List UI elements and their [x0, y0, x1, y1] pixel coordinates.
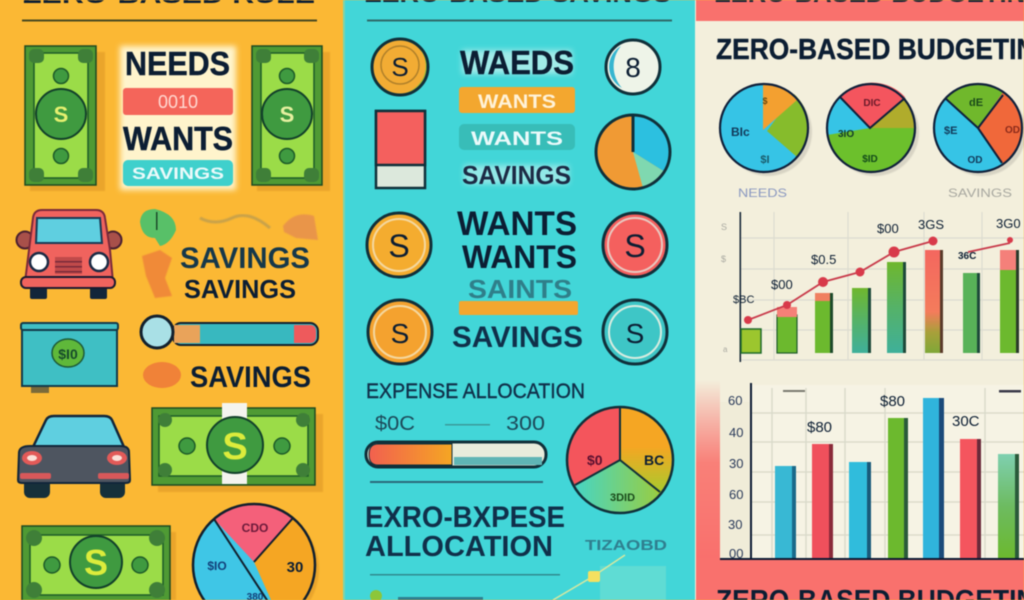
progress bar: expense allocation — [366, 413, 546, 483]
heading: expense allocation: EXPENSE ALLOCATION — [366, 380, 585, 403]
pie chart: second budget pie: 3IO — [838, 129, 854, 140]
icon: orange coin row three — [368, 300, 432, 364]
icon: orange coin row two — [367, 213, 431, 277]
text block: center labels top: WAEDS — [460, 44, 574, 81]
icon: dark car rear — [18, 416, 130, 498]
chart: column bar chart: 60 — [728, 393, 742, 408]
legend: needs label: NEEDS — [738, 186, 787, 200]
heading: exro-bxpese allocation: EXRO-BXPESE — [365, 501, 565, 534]
text block: center labels top: WANTS — [478, 92, 556, 113]
icon: vertical banknote left — [25, 46, 105, 191]
icon: savings doodle and repeated labels: SAVINGS — [180, 242, 310, 275]
text block: needs and wants labels: 0010 — [158, 92, 198, 112]
pie chart: third budget pie: OD — [968, 155, 982, 166]
icon: red car front — [16, 210, 122, 299]
icon: progress thermometer bar — [141, 316, 318, 348]
pie chart: first budget pie — [720, 84, 812, 176]
pie chart: third budget pie — [934, 84, 1024, 176]
pie chart: third budget pie: OD — [1005, 125, 1020, 136]
pie chart: first budget pie: BIc — [731, 125, 750, 139]
icon: bottom banknote: S — [84, 542, 108, 583]
icon: teal cash box — [21, 323, 118, 393]
icon: vertical banknote left: S — [54, 102, 68, 127]
icon: savings doodle and repeated labels: SAVINGS — [184, 274, 296, 304]
icon: gold coin — [372, 39, 428, 95]
chart: column bar chart: 30C — [952, 413, 980, 430]
pie chart: third budget pie: dE — [969, 97, 983, 109]
heading: exro-bxpese allocation — [365, 501, 565, 563]
chart: bar and line chart: $00 — [877, 221, 899, 236]
pie chart: left panel — [193, 504, 319, 600]
icon: horizontal banknote with strap — [152, 403, 323, 492]
pie chart: first budget pie: $ — [762, 96, 768, 106]
text block: center labels bottom: WANTS — [462, 239, 577, 275]
icon: white and teal coin — [606, 40, 660, 94]
progress bar: expense allocation: $0C — [375, 413, 415, 435]
text block: needs and wants labels: NEEDS — [125, 45, 230, 82]
panel divider strip — [343, 0, 345, 600]
icon: orange coin row three: S — [391, 318, 409, 349]
icon: teal coin row three — [603, 300, 667, 364]
text block: center labels bottom — [452, 205, 583, 354]
chart: bar and line chart: $00 — [771, 277, 793, 292]
chart: bar and line chart: 3G0 — [996, 216, 1021, 231]
pie chart: expense allocation — [567, 407, 673, 513]
pie chart: expense allocation: BC — [644, 452, 664, 468]
pie chart: left panel: 30 — [287, 559, 303, 576]
icon: bottom banknote — [22, 526, 176, 600]
icon: horizontal banknote with strap: S — [222, 426, 248, 468]
chart: bar and line chart: $0.5 — [811, 252, 836, 267]
progress bar: expense allocation: 300 — [506, 413, 545, 435]
chart: bar and line chart: 36C — [958, 251, 976, 262]
icon: white and teal coin: 8 — [625, 52, 641, 83]
icon: vertical banknote right: S — [280, 102, 294, 127]
chart: column bar chart: 30 — [728, 517, 742, 532]
chart: bar and line chart: a — [723, 345, 728, 354]
heading: exro-bxpese allocation: ALLOCATION — [365, 531, 553, 563]
pie chart: expense allocation: 3DID — [610, 492, 635, 504]
panel: zero-based savings — [344, 0, 695, 600]
icon: orange coin row two: S — [388, 228, 410, 264]
text block: center labels bottom: SAINTS — [468, 274, 572, 304]
text block: needs and wants labels: WANTS — [123, 120, 233, 157]
pie chart: left panel: CDO — [242, 521, 268, 535]
panel: zero-based budgeting — [695, 0, 1024, 600]
legend: savings label: SAVINGS — [948, 186, 1012, 200]
chart: column bar chart: 40 — [729, 425, 743, 440]
text block: needs and wants labels — [120, 45, 236, 190]
chart: bar and line chart: $ — [721, 254, 726, 264]
icon: gold coin: S — [391, 52, 409, 82]
pie chart: first budget pie: $I — [760, 154, 770, 166]
pie chart: third budget pie: $E — [944, 125, 957, 137]
chart: column bar chart: $80 — [880, 393, 905, 410]
icon: teal coin row three: S — [626, 318, 644, 349]
chart: bar and line chart: S — [721, 222, 727, 232]
pie chart: second budget pie — [827, 83, 919, 176]
icon: red coin row two — [603, 213, 667, 277]
chart: column bar chart: 00 — [729, 546, 743, 561]
icon: vertical banknote right — [252, 46, 330, 191]
text block: center labels bottom: SAVINGS — [452, 321, 583, 354]
text block: center labels top — [459, 44, 575, 190]
chart: bar and line chart: $BC — [733, 294, 754, 306]
panel: zero-based rule — [0, 0, 344, 600]
icon: savings doodle and repeated labels — [140, 209, 318, 304]
pie chart: second budget pie: $ID — [862, 154, 878, 165]
chart: bar and line chart: 3GS — [918, 217, 944, 232]
icon: teal cash box: $I0 — [58, 346, 78, 362]
chart: column bar chart — [720, 383, 1024, 561]
chart: column bar chart: 60 — [729, 487, 743, 502]
text block: savings with orange badge: SAVINGS — [190, 361, 311, 394]
text block: center labels bottom: WANTS — [457, 205, 577, 243]
chart: bar and line chart — [721, 212, 1024, 362]
chart: column bar chart: 30 — [729, 456, 743, 471]
text block: needs and wants labels: SAVINGS — [132, 164, 224, 183]
small line chart with label: TIZAOBD — [585, 537, 667, 554]
pie chart: left panel: $IO — [207, 559, 227, 573]
pie chart: top right of middle panel — [596, 115, 671, 189]
pie chart: second budget pie: DIC — [863, 98, 881, 109]
text block: savings with orange badge — [143, 361, 311, 394]
icon: red coin row two: S — [624, 228, 646, 264]
text block: center labels top: SAVINGS — [462, 160, 571, 190]
pie chart: expense allocation: $0 — [587, 452, 603, 468]
icon: red book — [376, 111, 425, 188]
small line chart with label — [370, 537, 667, 600]
text block: center labels top: WANTS — [471, 129, 563, 150]
chart: column bar chart: $80 — [807, 419, 832, 436]
